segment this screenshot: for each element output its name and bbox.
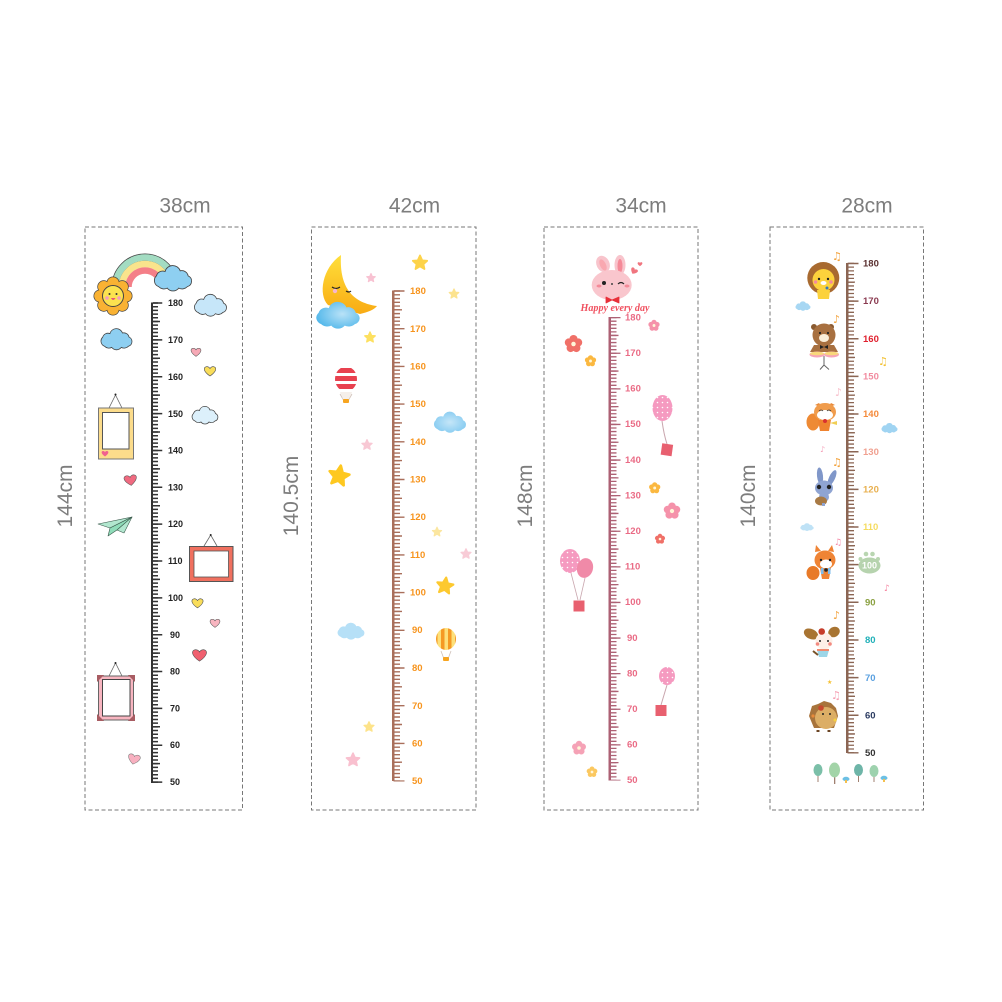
icon: rabbit with guitar — [815, 467, 838, 506]
icon: star yellow top — [413, 256, 427, 269]
dashed outline: 28 by 140 cm — [770, 227, 924, 810]
icon: heart pink bottom — [127, 753, 141, 765]
ruler numbers multicolored: 70 — [865, 673, 876, 684]
icon: yellow flower bottom — [587, 766, 597, 777]
ruler numbers: 160 — [168, 372, 183, 382]
icon: music notes: ♫ — [831, 689, 841, 702]
ruler numbers multicolored: 160 — [863, 334, 879, 345]
icon: pink balloon lower with gift — [656, 667, 675, 716]
ruler numbers: 130 — [625, 490, 641, 502]
icon: rainbow cloud — [154, 266, 192, 291]
ruler scale: rose — [608, 317, 616, 780]
icon: music notes: ♫ — [834, 538, 842, 548]
ruler numbers: 170 — [410, 324, 426, 335]
ruler numbers: 50 — [627, 775, 638, 786]
ruler numbers: 90 — [627, 633, 638, 644]
icon: star yellow small — [365, 332, 375, 342]
ruler numbers: 150 — [410, 399, 426, 410]
icon: fox with trumpet — [806, 403, 837, 431]
icon: paw badge 100: 100 — [862, 560, 877, 570]
ruler numbers: 80 — [627, 668, 638, 680]
icon: music notes: ♪ — [833, 609, 840, 622]
ruler numbers: 130 — [410, 474, 426, 486]
width label 38cm: 38cm — [159, 194, 211, 218]
ruler numbers multicolored: 50 — [865, 748, 876, 759]
icon: large cloud right — [434, 412, 466, 433]
ruler numbers: 170 — [625, 348, 641, 359]
icon: star pink — [367, 274, 375, 282]
icon: pink flower bottom — [572, 741, 586, 754]
ruler numbers multicolored: 90 — [865, 598, 876, 608]
ruler numbers: 70 — [170, 704, 180, 714]
icon: star yellow bottom — [364, 722, 374, 731]
width label 28cm: 28cm — [841, 194, 893, 218]
height label 140.5cm: 140.5cm — [280, 456, 303, 536]
icon: yellow flower middle — [649, 482, 660, 493]
panel: rainbow and frames height chart — [54, 194, 242, 810]
ruler numbers multicolored: 140 — [863, 409, 879, 420]
icon: squirrel — [806, 545, 836, 580]
icon: pink flower top — [648, 320, 660, 331]
ruler numbers: 50 — [170, 777, 180, 787]
ruler numbers: 50 — [412, 776, 423, 787]
icon: heart red — [124, 474, 137, 486]
ruler numbers: 90 — [170, 630, 180, 640]
icon: music notes: ♫ — [878, 355, 888, 368]
icon: row of trees and mushrooms — [814, 762, 888, 784]
ruler numbers multicolored — [863, 258, 879, 759]
ruler scale: brown — [392, 290, 399, 782]
width label 42cm: 42cm — [389, 194, 440, 218]
icon: pink dotted balloon with gift — [652, 395, 673, 456]
icon: red flower — [565, 335, 582, 352]
icon: music notes: ♪ — [833, 313, 840, 326]
icon: lion — [807, 262, 839, 299]
icon: yellow hanging frame — [98, 394, 134, 459]
ruler numbers: 180 — [168, 298, 183, 308]
icon: star gold large — [328, 464, 351, 486]
ruler numbers: 150 — [168, 409, 183, 419]
icon: heart yellow — [204, 367, 216, 376]
icon: orange hot air balloon — [436, 628, 456, 661]
panel: moon and stars height chart — [280, 194, 476, 810]
ruler numbers multicolored: 120 — [863, 484, 879, 496]
icon: red hanging frame — [190, 534, 233, 582]
panel: animals height chart — [737, 194, 924, 810]
ruler numbers multicolored: 150 — [863, 372, 879, 382]
ruler numbers: 60 — [412, 738, 423, 750]
icon: cloud under moon — [316, 302, 360, 329]
ruler numbers: 110 — [168, 556, 183, 566]
icon: red flower small — [655, 534, 665, 544]
icon: bear with drums — [810, 324, 839, 370]
icon: pink flower right — [664, 502, 680, 519]
icon: blue cloud by fox — [881, 423, 897, 433]
icon: music notes: ♫ — [832, 456, 842, 469]
ruler numbers — [410, 286, 426, 787]
text: happy every day: Happy every day — [579, 303, 650, 314]
height label 144cm: 144cm — [54, 464, 77, 528]
ruler numbers: 120 — [625, 526, 641, 537]
icon: star gold lower — [436, 576, 454, 594]
ruler numbers: 110 — [410, 550, 425, 561]
ruler numbers multicolored: 110 — [863, 522, 878, 533]
icon: star pink middle — [362, 440, 372, 449]
ruler numbers multicolored: 60 — [865, 710, 876, 722]
ruler numbers multicolored: 80 — [865, 635, 876, 646]
icon: rainbow — [116, 258, 174, 287]
icon: music notes: ★ — [827, 679, 832, 686]
ruler numbers: 70 — [627, 704, 638, 715]
icon: cloud upper right — [194, 294, 226, 316]
icon: music notes: ♫ — [832, 250, 842, 263]
icon: red striped hot air balloon — [335, 366, 357, 403]
icon: paper plane — [98, 517, 132, 536]
width label 34cm: 34cm — [615, 194, 667, 218]
height label 148cm: 148cm — [514, 464, 537, 528]
icon: star pale — [432, 527, 442, 536]
icon: heart pink — [191, 348, 201, 356]
ruler numbers: 100 — [410, 588, 426, 598]
ruler scale: dark brown — [846, 263, 853, 754]
ruler numbers: 100 — [625, 597, 641, 608]
icon: star pink right — [461, 549, 471, 558]
icon: music notes: ♪ — [884, 584, 890, 594]
ruler numbers: 130 — [168, 482, 183, 492]
dashed outline: 38 by 144 cm — [85, 227, 242, 810]
ruler numbers: 90 — [412, 625, 423, 636]
dashed outline: 42 by 140.5 cm — [312, 227, 476, 810]
ruler numbers: 170 — [168, 335, 183, 345]
ruler numbers: 60 — [170, 740, 180, 750]
icon: paw badge 100 — [858, 552, 880, 574]
icon: cloud middle right — [192, 406, 218, 424]
icon: heart yellow lower — [192, 599, 203, 608]
icon: music notes: ♪ — [835, 386, 842, 399]
ruler numbers: 70 — [412, 701, 423, 712]
ruler numbers: 160 — [410, 362, 426, 372]
dashed outline: 34 by 148 cm — [544, 227, 698, 810]
ruler numbers: 100 — [168, 593, 183, 603]
ruler numbers: 180 — [410, 286, 426, 297]
icon: bunny head with bow — [592, 254, 642, 303]
ruler numbers: 180 — [625, 312, 641, 324]
ruler numbers multicolored: 180 — [863, 258, 879, 270]
icon: pale cloud lower left — [338, 623, 364, 640]
ruler numbers: 140 — [625, 455, 641, 466]
ruler numbers: 60 — [627, 740, 638, 750]
icon: pink hanging frame — [97, 662, 135, 721]
icon: star pink bottom — [347, 753, 359, 765]
icon: sleeping crescent moon — [323, 255, 377, 314]
ruler numbers: 110 — [625, 562, 640, 572]
height label 140cm: 140cm — [737, 464, 760, 528]
icon: music notes: ♪ — [820, 445, 825, 454]
ruler numbers: 150 — [625, 419, 641, 430]
icon: yellow flower — [585, 355, 596, 366]
ruler numbers: 140 — [168, 446, 183, 456]
ruler scale: black — [151, 302, 158, 783]
panel: bunny and balloons height chart — [514, 194, 698, 810]
icon: heart red lower — [192, 650, 207, 661]
icon: music notes — [820, 250, 890, 702]
ruler numbers multicolored: 130 — [863, 447, 879, 458]
ruler numbers: 80 — [412, 663, 423, 674]
icon: twin balloons with gift — [560, 549, 595, 612]
ruler numbers — [625, 312, 641, 786]
icon: star pale yellow — [449, 289, 459, 298]
ruler numbers: 120 — [410, 512, 426, 523]
icon: pale cloud — [800, 523, 814, 531]
ruler numbers multicolored: 170 — [863, 296, 879, 307]
ruler numbers: 120 — [168, 519, 183, 529]
icon: heart pink lower — [210, 619, 220, 627]
icon: dog with apple — [802, 625, 842, 657]
icon: hedgehog — [809, 701, 838, 732]
ruler numbers — [168, 298, 183, 787]
icon: blue cloud by lion — [796, 301, 810, 311]
ruler numbers: 80 — [170, 666, 180, 676]
icon: smiling sun — [94, 276, 132, 316]
ruler numbers: 160 — [625, 384, 641, 394]
ruler numbers: 140 — [410, 437, 426, 448]
icon: cloud left — [101, 329, 132, 350]
